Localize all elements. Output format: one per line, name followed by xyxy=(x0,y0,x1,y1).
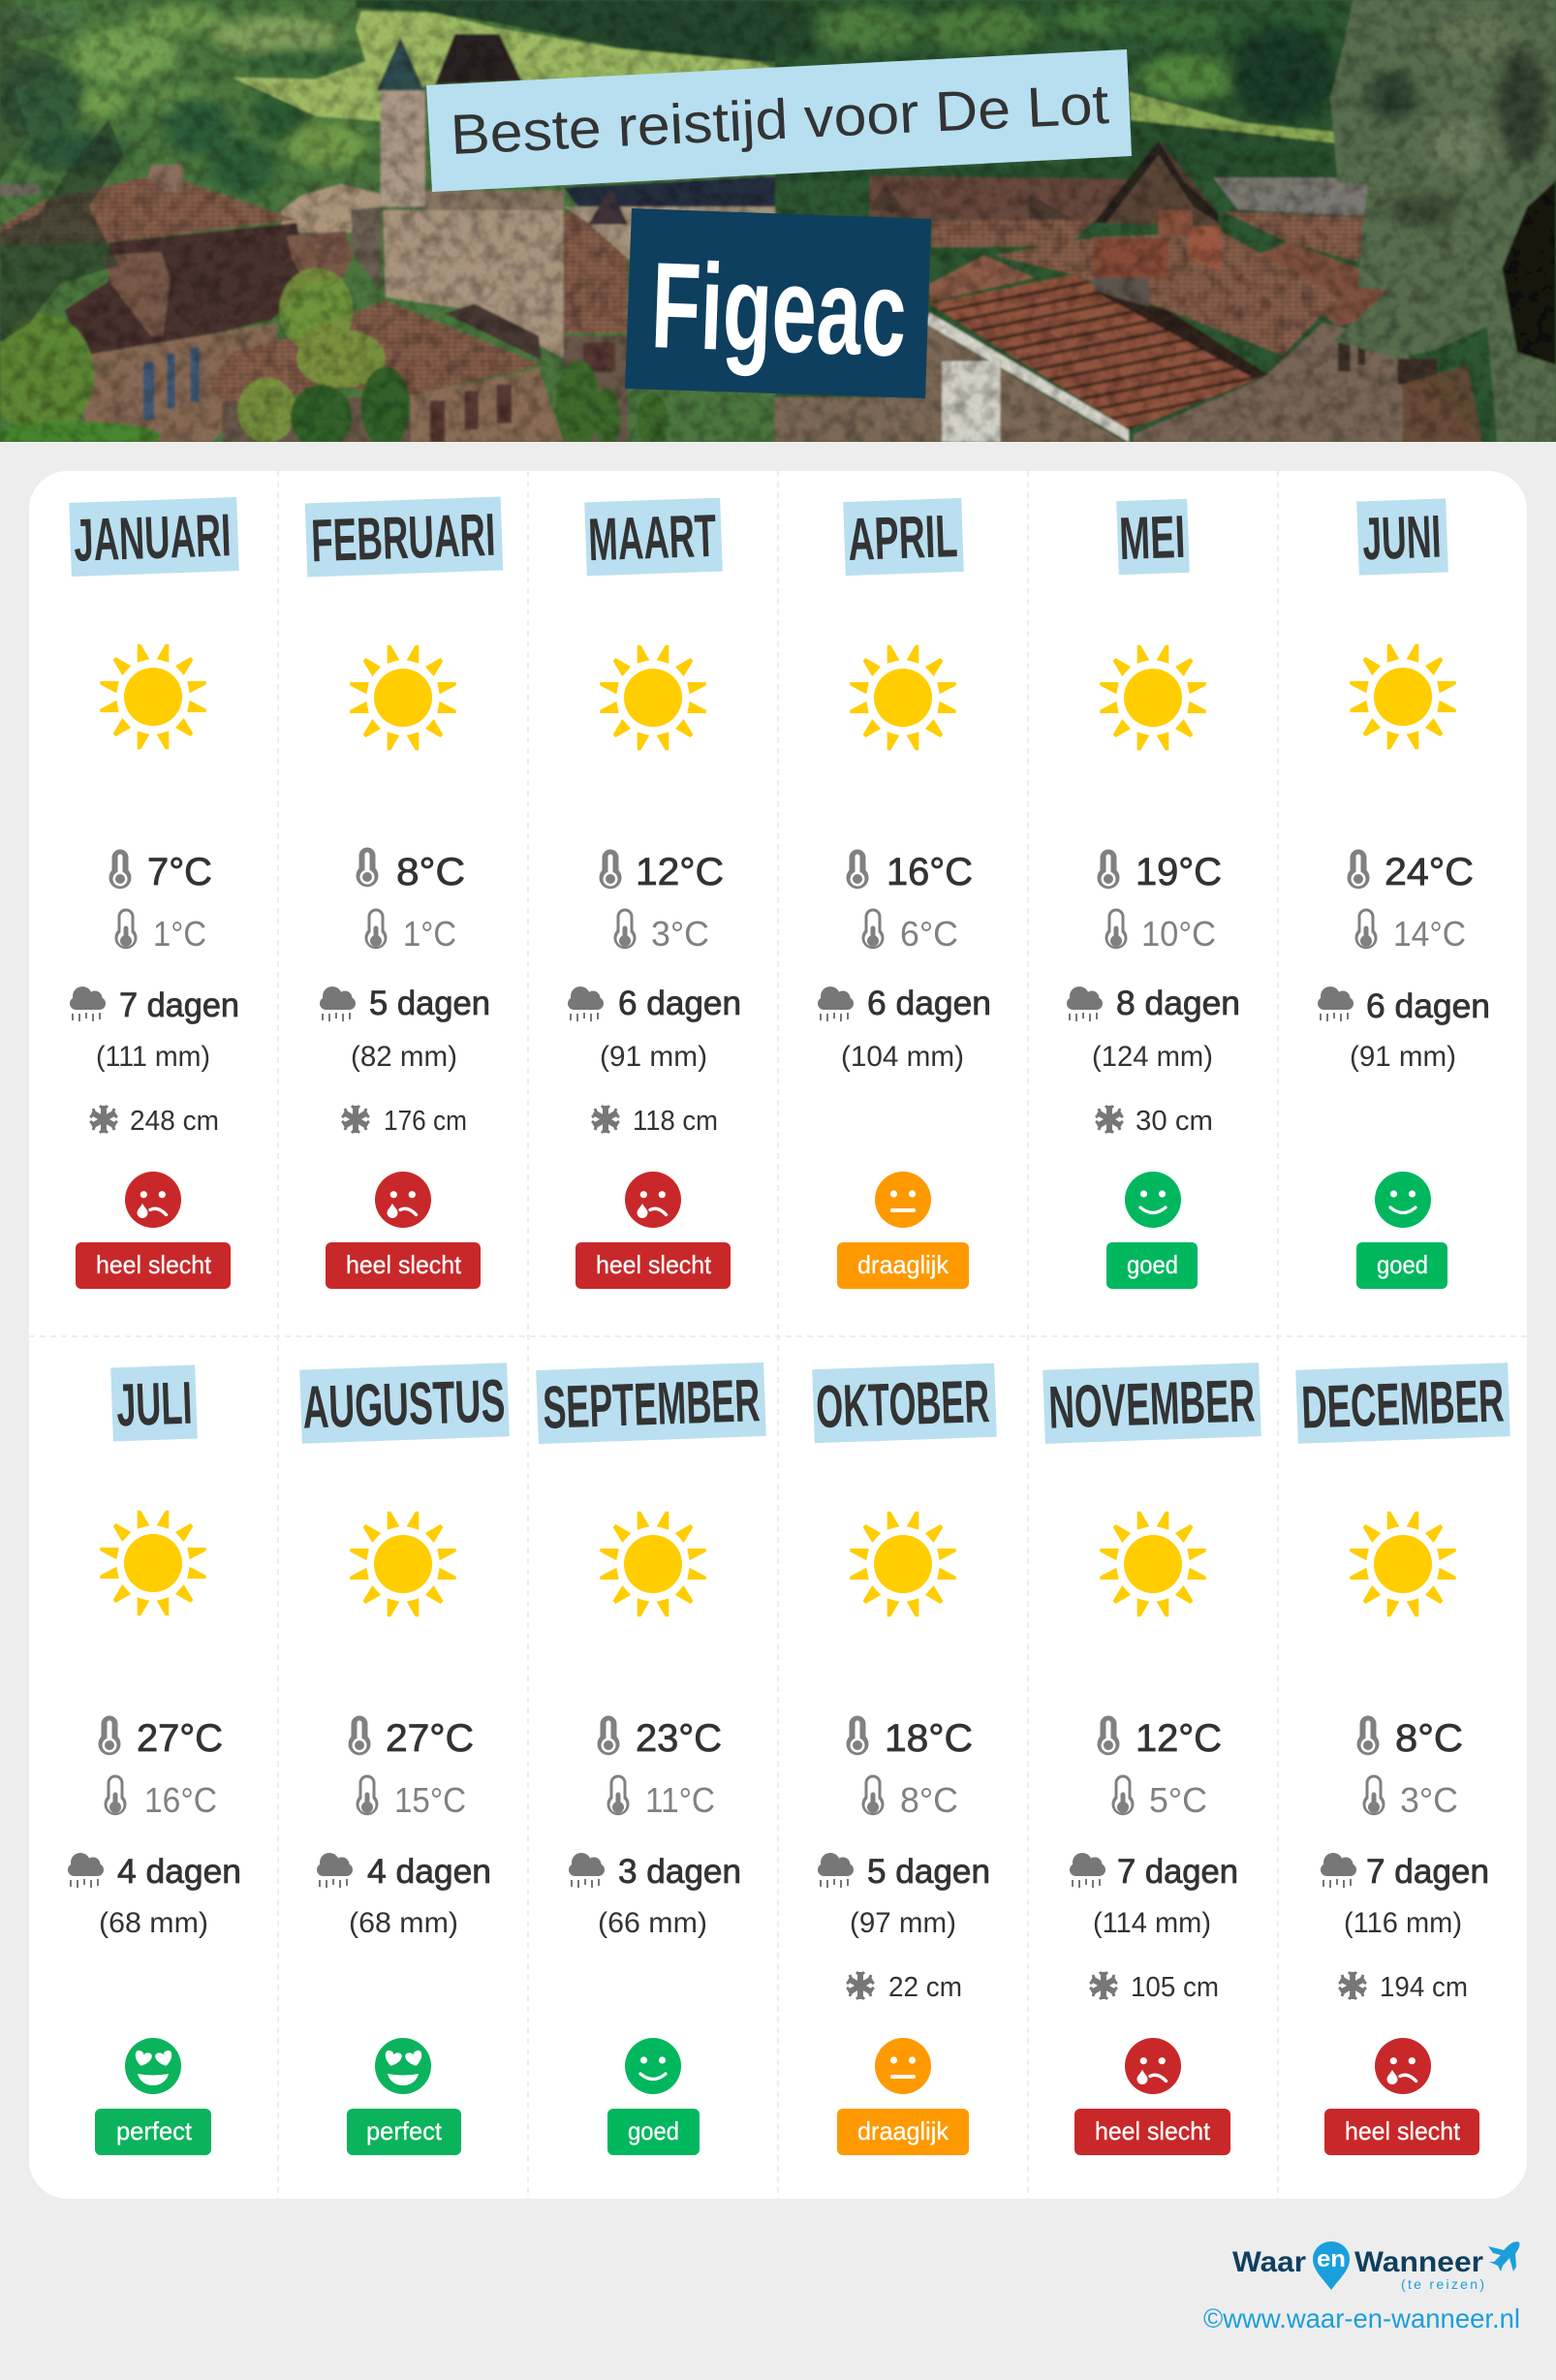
minimum temperature xyxy=(114,909,206,954)
rating face xyxy=(1375,1172,1431,1228)
minimum temperature xyxy=(105,1775,217,1820)
month label: APRIL xyxy=(847,503,958,574)
minimum temperature: 3°C xyxy=(651,914,709,954)
month label: MEI xyxy=(1118,504,1186,573)
maximum temperature: 23°C xyxy=(636,1717,722,1760)
maximum temperature xyxy=(1097,1715,1222,1760)
snowfall xyxy=(1090,1972,1219,2003)
minimum temperature: 1°C xyxy=(403,914,456,954)
snowfall xyxy=(90,1106,219,1137)
rating badge: goed xyxy=(1377,1250,1428,1279)
logo: Waar en Wanneer: (te reizen) xyxy=(1401,2276,1484,2292)
rating badge: heel slecht xyxy=(596,1250,712,1279)
banner: city name: Figeac xyxy=(649,236,909,382)
month label: MAART xyxy=(587,503,718,574)
rain days: 5 dagen xyxy=(369,985,490,1022)
month label xyxy=(69,497,239,577)
snowfall: 248 cm xyxy=(130,1106,219,1137)
icon: sun xyxy=(1350,1512,1456,1616)
minimum temperature: 10°C xyxy=(1141,914,1216,954)
minimum temperature xyxy=(1105,909,1216,954)
icon: sun xyxy=(350,645,456,750)
rain days xyxy=(70,986,239,1024)
month label: AUGUSTUS xyxy=(301,1367,506,1442)
minimum temperature xyxy=(364,909,456,954)
rating badge: goed xyxy=(628,2116,679,2145)
maximum temperature: 18°C xyxy=(885,1717,973,1760)
month label xyxy=(110,1365,198,1441)
icon: sun xyxy=(1350,644,1456,749)
rainfall: (114 mm) xyxy=(1093,1907,1211,1939)
month label: FEBRUARI xyxy=(310,502,496,575)
maximum temperature: 27°C xyxy=(137,1717,223,1760)
snowfall: 30 cm xyxy=(1136,1106,1213,1137)
rainfall: (124 mm) xyxy=(1092,1041,1213,1073)
rating badge: heel slecht xyxy=(1345,2116,1461,2145)
minimum temperature: 11°C xyxy=(645,1780,715,1820)
cell: januari xyxy=(69,497,239,1289)
month label xyxy=(305,496,503,578)
minimum temperature: 1°C xyxy=(153,914,206,954)
icon: sun xyxy=(100,1511,206,1615)
rainfall: (91 mm) xyxy=(600,1041,707,1073)
banner: city name xyxy=(625,208,931,398)
icon: sun xyxy=(600,645,706,750)
maximum temperature xyxy=(99,1715,223,1760)
maximum temperature xyxy=(1097,849,1222,893)
rating badge xyxy=(607,2109,700,2155)
rating badge: heel slecht xyxy=(96,1250,212,1279)
minimum temperature xyxy=(357,1775,466,1820)
snowfall xyxy=(847,1972,962,2003)
rainfall: (91 mm) xyxy=(1350,1041,1456,1073)
rating face xyxy=(625,2038,681,2094)
cell: november xyxy=(1043,1362,1261,2155)
snowfall: 194 cm xyxy=(1380,1972,1468,2003)
rating face xyxy=(625,1172,681,1228)
cell: december xyxy=(1295,1362,1510,2155)
maximum temperature xyxy=(109,849,212,893)
rain days: 5 dagen xyxy=(867,1853,990,1891)
rainfall: (116 mm) xyxy=(1344,1907,1462,1939)
minimum temperature xyxy=(1112,1775,1207,1820)
logo: Waar en Wanneer: en xyxy=(1317,2246,1346,2272)
month label xyxy=(536,1362,766,1444)
maximum temperature xyxy=(1347,849,1474,893)
month label xyxy=(1043,1362,1261,1444)
snowfall xyxy=(592,1106,718,1137)
cell: februari xyxy=(305,496,503,1289)
rain days: 4 dagen xyxy=(367,1853,491,1891)
snowfall xyxy=(1096,1106,1213,1137)
maximum temperature: 12°C xyxy=(1136,1717,1222,1760)
rainfall: (97 mm) xyxy=(850,1907,956,1939)
maximum temperature: 16°C xyxy=(887,851,973,893)
icon: sun xyxy=(850,645,956,750)
cell: mei xyxy=(1067,499,1240,1289)
website credit: ©www.waar-en-wanneer.nl xyxy=(1203,2303,1520,2333)
month label xyxy=(843,498,964,576)
maximum temperature: 8°C xyxy=(1395,1717,1463,1760)
rating badge: perfect xyxy=(366,2116,443,2145)
icon: sun xyxy=(350,1512,456,1616)
icon: sun xyxy=(1100,645,1206,750)
month label xyxy=(812,1363,997,1443)
banner: subtitle xyxy=(426,49,1132,192)
rating badge xyxy=(1356,1242,1447,1289)
rating badge: goed xyxy=(1127,1250,1178,1279)
rating badge: heel slecht xyxy=(1095,2116,1211,2145)
cell: september xyxy=(536,1362,766,2155)
logo: Waar en Wanneer: Waar xyxy=(1232,2246,1306,2278)
rainfall: (68 mm) xyxy=(349,1907,458,1939)
rating badge xyxy=(1106,1242,1198,1289)
rain days: 6 dagen xyxy=(1366,987,1490,1025)
month label: JUNI xyxy=(1361,504,1442,573)
hero photo: rooftops of Figeac xyxy=(0,0,1556,471)
maximum temperature: 19°C xyxy=(1136,851,1222,893)
panel: climate table xyxy=(29,471,1527,2199)
minimum temperature xyxy=(607,1775,715,1820)
rating badge xyxy=(1324,2109,1479,2155)
minimum temperature: 8°C xyxy=(900,1780,958,1820)
maximum temperature xyxy=(847,1715,973,1760)
snowfall: 22 cm xyxy=(888,1972,962,2003)
cell: oktober xyxy=(812,1363,997,2155)
rainfall: (104 mm) xyxy=(841,1041,964,1073)
minimum temperature xyxy=(862,909,958,954)
snowfall xyxy=(342,1106,467,1137)
minimum temperature: 3°C xyxy=(1400,1780,1458,1820)
banner: subtitle: Beste reistijd voor De Lot xyxy=(450,73,1110,167)
rating face xyxy=(1125,2038,1181,2094)
rating face xyxy=(875,1172,931,1228)
minimum temperature xyxy=(1362,1775,1458,1820)
cell: augustus xyxy=(299,1362,510,2155)
rainfall: (111 mm) xyxy=(96,1041,210,1073)
rating badge: heel slecht xyxy=(346,1250,462,1279)
rating badge xyxy=(95,2109,211,2155)
month label: SEPTEMBER xyxy=(542,1367,761,1442)
month label: OKTOBER xyxy=(815,1368,990,1441)
maximum temperature xyxy=(349,1715,474,1760)
rain days: 7 dagen xyxy=(1366,1853,1489,1891)
rain days: 3 dagen xyxy=(618,1853,741,1891)
rain days: 7 dagen xyxy=(119,986,239,1024)
minimum temperature xyxy=(862,1775,958,1820)
rain days: 4 dagen xyxy=(117,1853,241,1891)
month label: JANUARI xyxy=(73,502,232,575)
rating badge: perfect xyxy=(116,2116,193,2145)
rain days xyxy=(1318,986,1490,1025)
rain days: 6 dagen xyxy=(867,985,991,1022)
cell: juni xyxy=(1318,498,1490,1289)
rating badge xyxy=(76,1242,231,1289)
maximum temperature xyxy=(1356,1715,1463,1760)
rating face xyxy=(1125,1172,1181,1228)
rain days: 7 dagen xyxy=(1117,1853,1238,1891)
month label xyxy=(1356,498,1448,576)
maximum temperature xyxy=(847,849,973,893)
rainfall: (68 mm) xyxy=(99,1907,208,1939)
icon: sun xyxy=(850,1512,956,1616)
rain days: 8 dagen xyxy=(1116,985,1240,1022)
maximum temperature xyxy=(597,1715,722,1760)
minimum temperature: 16°C xyxy=(144,1780,217,1820)
rating badge: draaglijk xyxy=(857,2116,949,2145)
rating badge xyxy=(326,1242,481,1289)
month label: JULI xyxy=(115,1370,193,1439)
cell: maart xyxy=(568,498,741,1289)
minimum temperature: 5°C xyxy=(1149,1780,1207,1820)
rain days: 6 dagen xyxy=(618,985,741,1022)
month label: NOVEMBER xyxy=(1047,1367,1256,1442)
maximum temperature: 8°C xyxy=(396,851,465,893)
rating face xyxy=(375,1172,431,1228)
maximum temperature: 27°C xyxy=(386,1717,474,1760)
maximum temperature xyxy=(599,849,724,893)
rainfall: (82 mm) xyxy=(351,1041,457,1073)
rating badge xyxy=(347,2109,461,2155)
cell: april xyxy=(818,498,991,1289)
minimum temperature: 15°C xyxy=(394,1780,466,1820)
month label xyxy=(299,1362,510,1444)
rating face xyxy=(125,2038,181,2094)
cell: juli xyxy=(68,1365,241,2155)
rating badge xyxy=(837,1242,969,1289)
month label xyxy=(584,498,723,576)
rating face xyxy=(1375,2038,1431,2094)
minimum temperature: 14°C xyxy=(1393,914,1466,954)
maximum temperature: 7°C xyxy=(147,851,212,893)
icon: sun xyxy=(100,644,206,749)
month label xyxy=(1116,499,1190,575)
rating face xyxy=(375,2038,431,2094)
snowfall: 176 cm xyxy=(384,1106,467,1137)
maximum temperature: 24°C xyxy=(1385,851,1474,893)
logo: Waar en Wanneer: Wanneer xyxy=(1354,2246,1483,2278)
minimum temperature: 6°C xyxy=(900,914,958,954)
snowfall xyxy=(1339,1972,1468,2003)
icon: sun xyxy=(1100,1512,1206,1616)
rating face xyxy=(125,1172,181,1228)
rating face xyxy=(875,2038,931,2094)
minimum temperature xyxy=(1354,909,1466,954)
icon: sun xyxy=(600,1512,706,1616)
logo: Waar en Wanneer xyxy=(1232,2241,1519,2292)
rating badge xyxy=(576,1242,731,1289)
rainfall: (66 mm) xyxy=(598,1907,707,1939)
rating badge: draaglijk xyxy=(857,1250,949,1279)
maximum temperature: 12°C xyxy=(636,851,724,893)
rating badge xyxy=(1074,2109,1230,2155)
snowfall: 105 cm xyxy=(1131,1972,1219,2003)
minimum temperature xyxy=(614,909,709,954)
snowfall: 118 cm xyxy=(633,1106,718,1137)
maximum temperature xyxy=(357,847,465,893)
rating badge xyxy=(837,2109,969,2155)
